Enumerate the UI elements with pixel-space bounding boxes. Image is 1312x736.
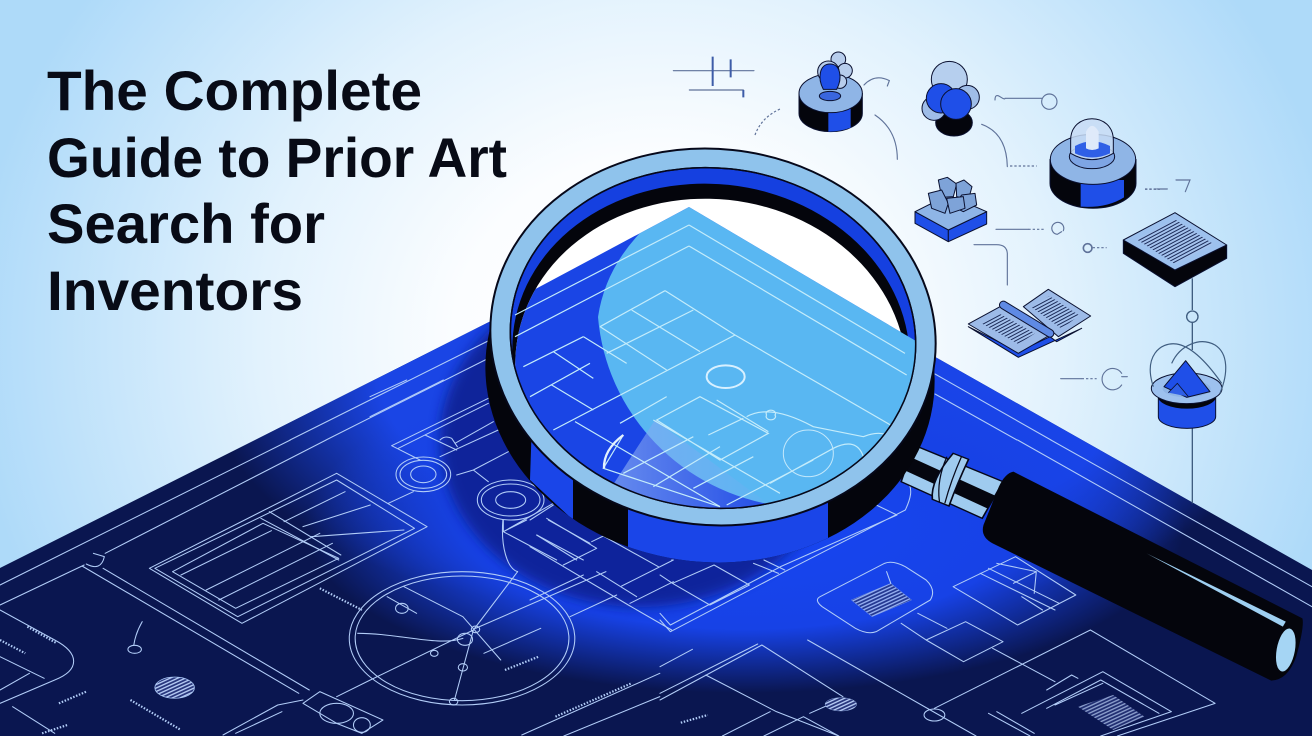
title: Search for	[47, 192, 325, 255]
blueprint linework: beneath lens	[530, 505, 673, 630]
icon: magnifying glass	[470, 127, 1303, 681]
magnifier handle grip	[983, 472, 1303, 681]
small symbols near the dome	[1145, 180, 1190, 192]
blueprint linework: left side	[0, 440, 660, 736]
blueprint linework: upper edges	[290, 340, 1051, 440]
lens magnified linework	[515, 225, 907, 507]
icon: open book	[968, 289, 1091, 357]
icon: cubes on square base	[915, 177, 987, 242]
vertical connector with node	[1187, 278, 1198, 503]
magnifier handle connector	[901, 445, 1303, 681]
title: The Complete	[47, 59, 422, 122]
blueprint linework: beside lens, left	[370, 380, 590, 560]
blueprint linework: right side	[660, 440, 1312, 736]
ring outer wall	[485, 332, 935, 562]
icon: glass dome on cylinder	[1050, 119, 1136, 208]
ring rim	[472, 127, 954, 547]
title: Inventors	[47, 259, 303, 322]
connector lines and small symbols	[673, 57, 1160, 390]
title	[47, 59, 507, 322]
icon: lightbulb on cylinder	[799, 52, 862, 132]
title: Guide to Prior Art	[47, 126, 507, 189]
icon: pyramid in cup	[1150, 342, 1226, 428]
icon: sphere cluster	[922, 61, 979, 136]
lens glass	[512, 184, 915, 508]
icon: document slab	[1123, 213, 1227, 287]
ring inner wall	[493, 148, 933, 528]
blueprint sheet	[0, 322, 1312, 736]
